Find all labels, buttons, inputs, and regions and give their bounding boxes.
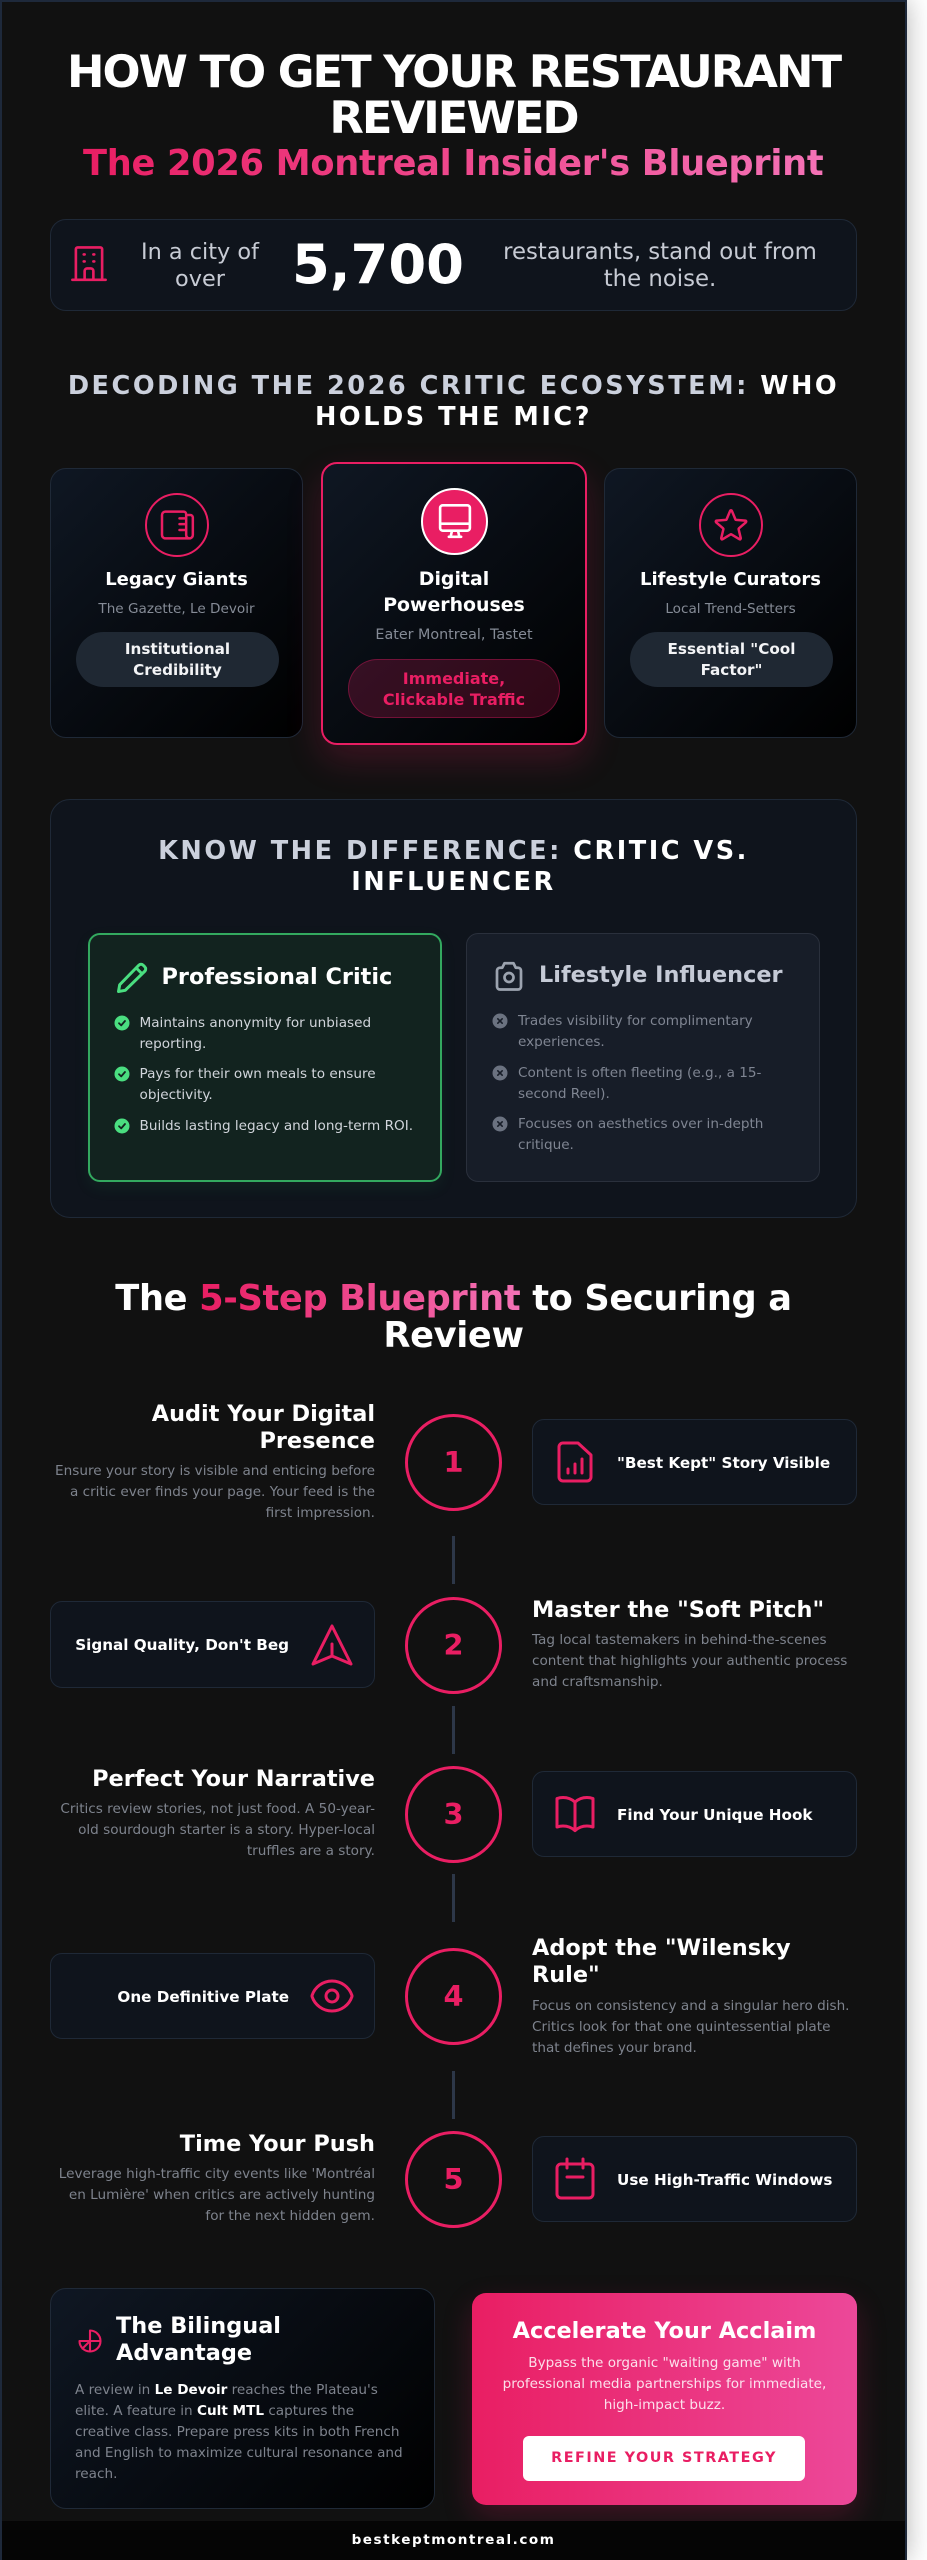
card pill xyxy=(76,632,279,687)
icon: monitor xyxy=(421,488,488,555)
list item: objectivity. xyxy=(140,1087,213,1103)
card subtitle: Eater Montreal, Tastet xyxy=(375,627,533,643)
step 5 xyxy=(59,2131,857,2228)
step number xyxy=(405,2131,502,2228)
tag label: Find Your Unique Hook xyxy=(617,1806,812,1824)
step number: 4 xyxy=(443,1979,464,2013)
stat trailing text: the noise. xyxy=(604,266,716,292)
step 2 xyxy=(50,1597,847,1694)
step title: Audit Your Digital xyxy=(152,1401,375,1427)
panel: critic vs influencer xyxy=(50,799,857,1218)
heading xyxy=(158,836,749,897)
step number xyxy=(405,1597,502,1694)
card title: Lifestyle Curators xyxy=(640,569,821,590)
card title: Legacy Giants xyxy=(105,569,248,590)
card pill: Institutional xyxy=(125,640,230,658)
step number xyxy=(405,1414,502,1511)
icon: calendar xyxy=(556,2158,594,2200)
step tag xyxy=(50,1953,375,2039)
stat trailing text xyxy=(503,239,817,292)
heading: Advantage xyxy=(116,2340,252,2366)
body text: A review in Le Devoir reaches the Plateau's xyxy=(75,2382,378,2398)
step 3 connector xyxy=(452,1874,455,1922)
step description: a critic ever finds your page. Your feed is the xyxy=(70,1484,375,1500)
step 1 xyxy=(55,1401,857,1521)
step description xyxy=(532,1632,847,1690)
step description: en Lumière' when critics are actively hunting xyxy=(69,2187,375,2203)
heading: 5-step blueprint: Review xyxy=(383,1315,524,1356)
step description xyxy=(60,1801,375,1859)
step description: Focus on consistency and a singular hero dish. xyxy=(532,1998,850,2014)
list item: critique. xyxy=(518,1137,574,1153)
step description xyxy=(59,2166,375,2224)
step description: Tag local tastemakers in behind-the-scenes xyxy=(532,1632,827,1648)
card pill: Factor" xyxy=(701,661,762,679)
heading: critic ecosystem xyxy=(68,371,839,432)
body text: creative class. Prepare press kits in both French xyxy=(75,2424,400,2440)
list item: Pays for their own meals to ensure xyxy=(140,1066,376,1082)
step number: 5 xyxy=(443,2162,464,2196)
panel: lifestyle curators xyxy=(604,468,857,738)
heading: 5-step blueprint xyxy=(115,1278,792,1356)
step description xyxy=(55,1463,375,1521)
heading: critic ecosystem: DECODING THE 2026 CRITIC ECOSYSTEM: WHO xyxy=(68,371,839,401)
step number xyxy=(405,1766,502,1863)
list item: second Reel). xyxy=(518,1086,610,1102)
step description: old sourdough starter is a story. Hyper-local xyxy=(78,1822,375,1838)
icon: cross xyxy=(492,1066,508,1080)
body text: high-impact buzz. xyxy=(604,2397,725,2413)
footer: bestkeptmontreal.com xyxy=(352,2532,555,2548)
tag label: One Definitive Plate xyxy=(117,1988,289,2006)
card pill: Credibility xyxy=(133,661,222,679)
list item xyxy=(140,1015,371,1052)
body text xyxy=(472,2353,857,2416)
heading: KNOW THE DIFFERENCE: CRITIC VS. xyxy=(158,836,749,866)
icon: building xyxy=(71,246,107,282)
stat lead text: In a city of xyxy=(141,239,259,265)
icon: cross xyxy=(492,1116,508,1132)
card subtitle: The Gazette, Le Devoir xyxy=(98,601,255,617)
body text: Bypass the organic "waiting game" with xyxy=(528,2355,801,2371)
list item: experiences. xyxy=(518,1034,605,1050)
step number: 1 xyxy=(443,1445,464,1479)
icon: check xyxy=(114,1118,130,1134)
step number xyxy=(405,1948,502,2045)
step title: Perfect Your Narrative xyxy=(92,1766,375,1792)
footer xyxy=(2,2521,905,2560)
body text: and English to maximize cultural resonance and xyxy=(75,2445,403,2461)
step title: Adopt the "Wilensky xyxy=(532,1935,791,1961)
step 4 xyxy=(50,1935,850,2056)
list item: Content is often fleeting (e.g., a 15- xyxy=(518,1065,761,1081)
list item: reporting. xyxy=(140,1036,206,1052)
icon: newspaper xyxy=(145,493,209,557)
step description: and craftsmanship. xyxy=(532,1674,663,1690)
card: lifestyle influencer xyxy=(466,933,820,1182)
step description xyxy=(532,1998,850,2056)
button xyxy=(523,2436,805,2481)
card title: Powerhouses xyxy=(383,594,525,616)
heading: 5-step blueprint: The 5-Step Blueprint to Securing a xyxy=(115,1278,792,1319)
step title: Rule" xyxy=(532,1962,600,1988)
body text: elite. A feature in Cult MTL captures the xyxy=(75,2403,354,2419)
card subtitle: Local Trend-Setters xyxy=(665,601,796,617)
step title: Master the "Soft Pitch" xyxy=(532,1597,824,1623)
stat number: 5,700 xyxy=(292,233,464,296)
step title: Presence xyxy=(259,1428,375,1454)
title: REVIEWED xyxy=(329,90,578,144)
heading xyxy=(116,2313,281,2366)
step number: 2 xyxy=(443,1628,464,1662)
body text: professional media partnerships for immediate, xyxy=(503,2376,826,2392)
list item xyxy=(518,1065,761,1102)
heading: The Bilingual xyxy=(116,2313,281,2339)
card title: Digital xyxy=(419,568,489,590)
icon: camera xyxy=(496,962,522,991)
icon: check xyxy=(114,1016,130,1030)
step title: Time Your Push xyxy=(180,2131,375,2157)
card pill: Clickable Traffic xyxy=(383,690,525,709)
step description: Leverage high-traffic city events like 'Montréal xyxy=(59,2166,375,2182)
step tag xyxy=(532,2136,857,2222)
step description: Ensure your story is visible and enticing before xyxy=(55,1463,375,1479)
button: REFINE YOUR STRATEGY xyxy=(551,2450,777,2466)
step description: content that highlights your authentic process xyxy=(532,1653,847,1669)
step 4 connector xyxy=(452,2071,455,2119)
step description: first impression. xyxy=(266,1505,375,1521)
stat lead text: over xyxy=(175,266,225,292)
step 2 connector xyxy=(452,1706,455,1754)
step tag xyxy=(532,1419,857,1505)
list item: Builds lasting legacy and long-term ROI. xyxy=(140,1118,413,1134)
icon: document chart xyxy=(558,1442,592,1482)
step 1 connector xyxy=(452,1536,455,1584)
icon: star xyxy=(699,493,763,557)
list item xyxy=(518,1013,753,1050)
card pill: Immediate, xyxy=(403,669,505,688)
step description: Critics review stories, not just food. A 50-year- xyxy=(60,1801,375,1817)
body text xyxy=(75,2380,403,2485)
step title xyxy=(152,1401,375,1454)
card pill xyxy=(348,659,560,718)
icon: cross xyxy=(492,1014,508,1028)
subtitle: The 2026 Montreal Insider's Blueprint xyxy=(83,143,823,184)
list item xyxy=(140,1066,376,1103)
stat trailing text: restaurants, stand out from xyxy=(503,239,817,265)
step tag xyxy=(50,1601,375,1688)
list item xyxy=(518,1116,763,1153)
step description: for the next hidden gem. xyxy=(205,2208,375,2224)
body text: reach. xyxy=(75,2466,117,2482)
list item: Focuses on aesthetics over in-depth xyxy=(518,1116,763,1132)
card: professional critic xyxy=(88,933,442,1182)
tag label: "Best Kept" Story Visible xyxy=(617,1454,830,1472)
tag label: Use High-Traffic Windows xyxy=(617,2171,832,2189)
step 3 xyxy=(60,1766,857,1863)
heading: Professional Critic xyxy=(162,964,392,990)
card pill xyxy=(630,632,833,687)
step description: that defines your brand. xyxy=(532,2040,697,2056)
heading: Accelerate Your Acclaim xyxy=(513,2318,816,2344)
tag label: Signal Quality, Don't Beg xyxy=(75,1636,289,1654)
icon: book xyxy=(556,1796,594,1832)
step description: Critics look for that one quintessential plate xyxy=(532,2019,830,2035)
step description: truffles are a story. xyxy=(247,1843,375,1859)
icon: pencil xyxy=(117,962,148,993)
icon: pie chart xyxy=(78,2330,102,2352)
icon: eye xyxy=(310,1980,354,2012)
title xyxy=(67,45,842,144)
heading: INFLUENCER xyxy=(351,867,556,897)
list item: Maintains anonymity for unbiased xyxy=(140,1015,371,1031)
icon: check xyxy=(114,1066,130,1082)
icon: navigation xyxy=(312,1624,353,1666)
step tag xyxy=(532,1771,857,1857)
panel: bilingual advantage xyxy=(50,2288,435,2509)
panel: call to action xyxy=(472,2293,857,2505)
panel: legacy giants xyxy=(50,468,303,738)
stat lead text xyxy=(141,239,260,292)
card title xyxy=(383,568,525,616)
step title xyxy=(532,1935,791,1988)
heading: critic ecosystem: HOLDS THE MIC? xyxy=(315,402,592,432)
title: HOW TO GET YOUR RESTAURANT xyxy=(67,45,840,98)
stat bar xyxy=(50,219,857,311)
step number: 3 xyxy=(443,1797,464,1831)
card pill: Essential "Cool xyxy=(668,640,795,658)
panel: digital powerhouses xyxy=(321,462,587,745)
list item: Trades visibility for complimentary xyxy=(518,1013,753,1029)
heading: Lifestyle Influencer xyxy=(539,962,783,988)
